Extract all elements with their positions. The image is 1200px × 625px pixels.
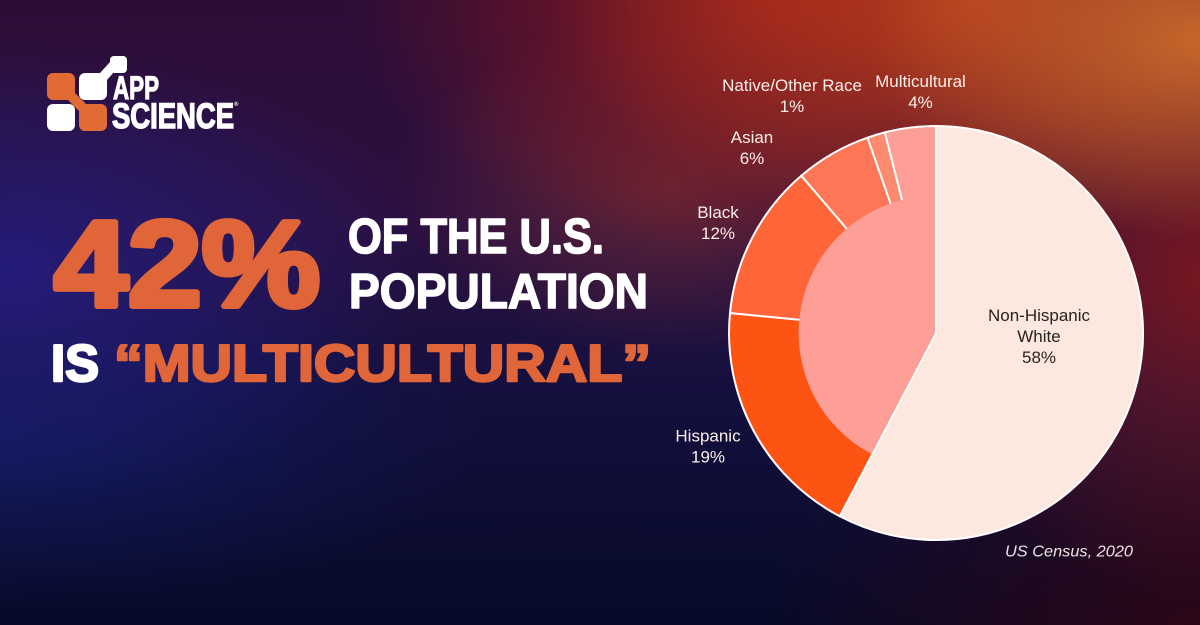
headline word: is: IS bbox=[51, 335, 99, 393]
label: Hispanic: 19% bbox=[691, 448, 725, 466]
logo wordmark: ® bbox=[234, 101, 239, 108]
label: Black: Black bbox=[697, 203, 739, 222]
label: Native/Other Race: 1% bbox=[780, 97, 804, 116]
big number: 42%: 42% bbox=[54, 196, 320, 332]
logo wordmark: SCIENCE bbox=[112, 97, 234, 136]
slice: Native/Other Race 1% bbox=[868, 132, 936, 333]
headline word: multicultural: “MULTICULTURAL” bbox=[114, 335, 651, 393]
headline line: of the U.S.: OF THE U.S. bbox=[348, 210, 604, 264]
label: Non-Hispanic White: White bbox=[1017, 327, 1061, 346]
logo wordmark bbox=[112, 70, 239, 136]
label: Multicultural: 4% bbox=[908, 93, 933, 112]
inner pie: multicultural total 42% bbox=[799, 196, 935, 454]
headline bbox=[51, 196, 651, 393]
slice: Multicultural 4% bbox=[885, 126, 936, 333]
label: Hispanic: Hispanic bbox=[675, 426, 741, 446]
pie chart bbox=[729, 126, 1143, 540]
source note: US Census, 2020 bbox=[1005, 544, 1133, 560]
logo wordmark: APP bbox=[113, 70, 159, 106]
label: Non-Hispanic White: Non-Hispanic bbox=[988, 306, 1090, 325]
slice: Black 12% bbox=[730, 176, 936, 333]
label: Asian: 6% bbox=[740, 149, 764, 168]
label: Asian: Asian bbox=[731, 128, 773, 147]
icon: logo squares bbox=[47, 56, 127, 131]
slice: Hispanic 19% bbox=[729, 313, 936, 516]
label: Multicultural: Multicultural bbox=[875, 72, 966, 91]
label: Black: 12% bbox=[701, 224, 735, 243]
headline line: population: POPULATION bbox=[349, 265, 648, 319]
logo: App Science bbox=[47, 56, 239, 136]
chart labels bbox=[675, 72, 1091, 466]
slice: Asian 6% bbox=[801, 138, 936, 333]
slice: non-Hispanic white 58% bbox=[840, 126, 1143, 540]
label: Native/Other Race: Native/Other Race bbox=[722, 76, 862, 95]
label: Non-Hispanic White: 58% bbox=[1022, 348, 1056, 367]
